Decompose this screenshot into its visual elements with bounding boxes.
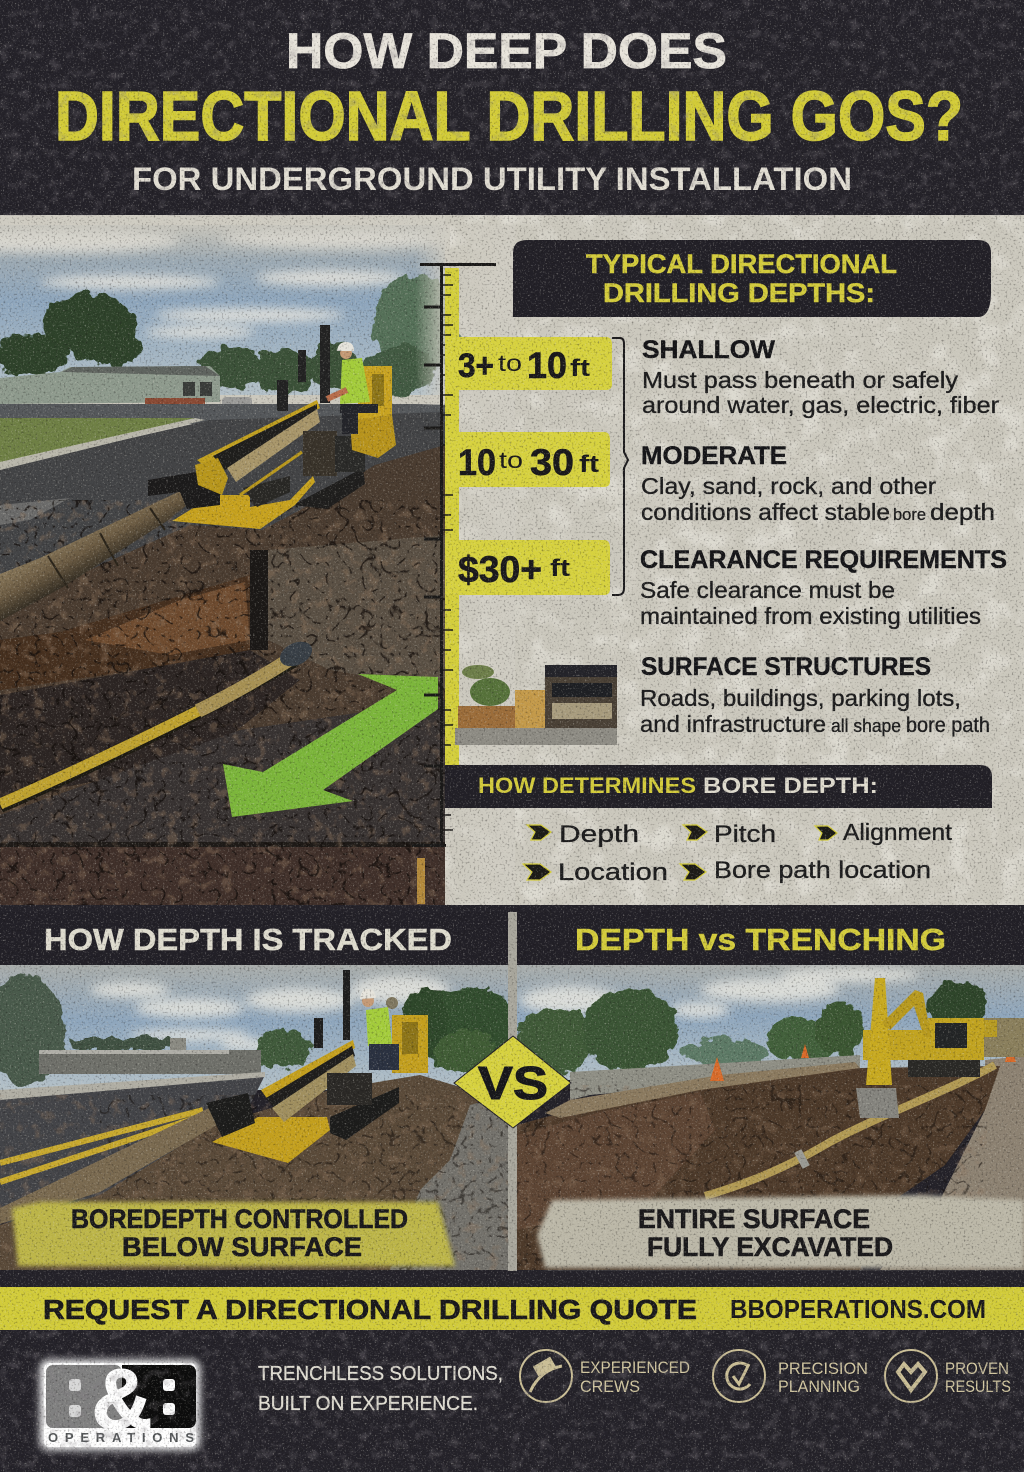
text block: shallow: SHALLOW [642, 336, 775, 364]
large pipe [0, 491, 187, 621]
road distant [0, 404, 445, 424]
label: precision planning: PRECISION [778, 1359, 868, 1378]
text block: clearance requirements: Safe clearance must be [640, 577, 895, 603]
text block: surface structures: SURFACE STRUCTURES [641, 653, 931, 681]
depth label: 10 to 30 ft: ft [579, 451, 599, 478]
factor: location: Location [558, 859, 668, 886]
texture: cracked ground [0, 500, 445, 905]
heading: HOW DEPTH IS TRACKED [44, 922, 452, 957]
kerb [0, 418, 205, 470]
main photo: drilling rig on site [0, 225, 460, 905]
cones [710, 1057, 724, 1081]
text block: shallow: around water, gas, electric, fiber [642, 392, 999, 418]
panel: how depth is tracked: BELOW SURFACE [122, 1232, 362, 1262]
main panel paper background [0, 215, 1024, 907]
text block: clearance requirements: CLEARANCE REQUIREMENTS [640, 546, 1007, 574]
footer: BUILT ON EXPERIENCE. [258, 1393, 478, 1415]
panel: how determines bore depth heading: BORE DEPTH: [703, 773, 878, 798]
text block: shallow [642, 336, 999, 418]
masts [320, 325, 330, 403]
depth label: 10 to 30 ft: 10 [458, 442, 496, 483]
icon: precision planning [713, 1350, 765, 1402]
asphalt road [0, 412, 445, 610]
pipe [705, 1065, 995, 1196]
depth label: 3+ to 10 ft: 3+ [458, 347, 494, 385]
operator [340, 358, 370, 404]
caption patch [537, 1195, 1024, 1268]
hose to coupling [0, 660, 295, 806]
factor: pitch: Pitch [714, 821, 776, 848]
drill rig [148, 325, 396, 529]
right ground [880, 1056, 1024, 1270]
dirt [0, 1075, 508, 1270]
footer: PLANNING [778, 1377, 860, 1396]
VS diamond: VS [478, 1057, 548, 1109]
label: experienced crews: EXPERIENCED [580, 1358, 690, 1377]
paper fade over photo edges [0, 215, 515, 905]
panel: how depth is tracked [0, 912, 525, 1270]
trench [517, 1066, 1000, 1270]
logo: B [135, 1350, 195, 1446]
panel: how determines bore depth heading [445, 765, 992, 808]
text block: moderate: depth [930, 499, 995, 525]
sky [517, 965, 1024, 1080]
depth label: 3+ to 10 ft [445, 337, 612, 390]
icon: arrow bullets [523, 825, 837, 880]
call to action: REQUEST A DIRECTIONAL DRILLING QUOTE [43, 1294, 697, 1325]
engine [358, 366, 392, 436]
heading line 1: TYPICAL DIRECTIONAL [586, 249, 897, 279]
text block: surface structures: Roads, buildings, parking lots, [640, 685, 961, 711]
text block: surface structures: and infrastructure [640, 711, 826, 737]
factor: bore path location: Bore path location [714, 857, 931, 884]
dirt ground [0, 445, 445, 905]
coupling [276, 637, 316, 671]
rig crawler track [293, 468, 365, 509]
quote band [0, 1287, 1024, 1330]
trees [517, 981, 987, 1074]
drill rig small [206, 970, 428, 1163]
drill head [148, 468, 220, 509]
trees [0, 275, 457, 396]
text block: moderate: MODERATE [641, 442, 787, 470]
stake [417, 858, 425, 904]
platform [303, 431, 337, 476]
logo [40, 1350, 200, 1450]
trench lip [545, 1062, 860, 1118]
title line 1: HOW DEEP DOES [286, 23, 727, 79]
text block: surface structures: all shape [831, 716, 901, 736]
heading: DEPTH vs TRENCHING [575, 922, 946, 957]
logo: B [47, 1350, 109, 1446]
website: BBOPERATIONS.COM [730, 1294, 986, 1324]
depth label: 3+ to 10 ft: 10 [527, 345, 567, 386]
depth label: 3+ to 10 ft: to [498, 350, 522, 376]
grass [0, 418, 195, 462]
illustration: surface building [455, 665, 617, 745]
label: proven results: PROVEN [945, 1359, 1009, 1378]
depth label: 10 to 30 ft: to [499, 447, 523, 473]
text block: moderate: bore [893, 505, 926, 524]
trees [0, 975, 525, 1085]
logo: OPERATIONS [48, 1430, 194, 1445]
depth label: 10 to 30 ft: 30 [530, 442, 574, 483]
depth label: 10 to 30 ft [445, 432, 610, 487]
header strip [517, 912, 1024, 965]
sky [0, 225, 445, 395]
road lines [0, 1110, 203, 1182]
sky [0, 965, 508, 1090]
rig yellow base [172, 476, 315, 529]
text block: moderate [641, 442, 995, 525]
header strip [0, 912, 508, 965]
panel: depth vs trenching [517, 912, 1024, 1270]
header band [0, 0, 1024, 216]
factor list [523, 819, 953, 886]
factor: depth: Depth [559, 821, 639, 848]
post in trench [250, 550, 268, 650]
factor: alignment: Alignment [843, 819, 953, 845]
tagline: TRENCHLESS SOLUTIONS, [258, 1363, 503, 1385]
caption: ENTIRE SURFACE [638, 1204, 870, 1234]
caption: BOREDEPTH CONTROLLED [71, 1204, 408, 1234]
ground patches [0, 575, 250, 690]
text block: clearance requirements [640, 546, 1007, 629]
footer [0, 1271, 1024, 1472]
logo: & [92, 1352, 152, 1446]
text block: surface structures [640, 653, 990, 737]
icon: proven results [885, 1350, 937, 1402]
icon: experienced crews [520, 1350, 572, 1402]
road [0, 1075, 265, 1225]
far ground [570, 1055, 860, 1100]
pipe [0, 1108, 222, 1224]
panel: how determines bore depth heading: HOW DETERMINES [478, 773, 696, 798]
text block: moderate: conditions affect stable [641, 499, 890, 525]
text block: clearance requirements: maintained from existing utilities [640, 603, 981, 629]
depth label: 3+ to 10 ft: ft [570, 355, 590, 382]
footer: RESULTS [945, 1377, 1011, 1396]
footer: CREWS [580, 1377, 640, 1396]
text block: shallow: Must pass beneath or safely [642, 367, 959, 393]
subtitle: FOR UNDERGROUND UTILITY INSTALLATION [132, 161, 852, 197]
depth label: 30+ ft: ft [550, 555, 570, 582]
bracket [612, 338, 628, 595]
building [39, 1050, 261, 1074]
panel: typical depths heading [513, 240, 991, 317]
lower section background [0, 905, 1024, 1271]
yellow ruler [412, 263, 496, 847]
VS diamond [454, 1036, 571, 1128]
text block: surface structures: bore path [906, 714, 990, 737]
text block: moderate: Clay, sand, rock, and other [641, 473, 936, 499]
excavator [856, 978, 1024, 1118]
depth label: 30+ ft: $30+ [458, 549, 542, 590]
depth label: 30+ ft [445, 540, 610, 595]
green arrow [223, 674, 438, 817]
rails [197, 400, 320, 470]
heading line 2: DRILLING DEPTHS: [603, 278, 875, 308]
panel: depth vs trenching: FULLY EXCAVATED [647, 1232, 893, 1262]
divider between panels [508, 912, 517, 1271]
caption patch [12, 1202, 455, 1266]
building [0, 366, 220, 404]
